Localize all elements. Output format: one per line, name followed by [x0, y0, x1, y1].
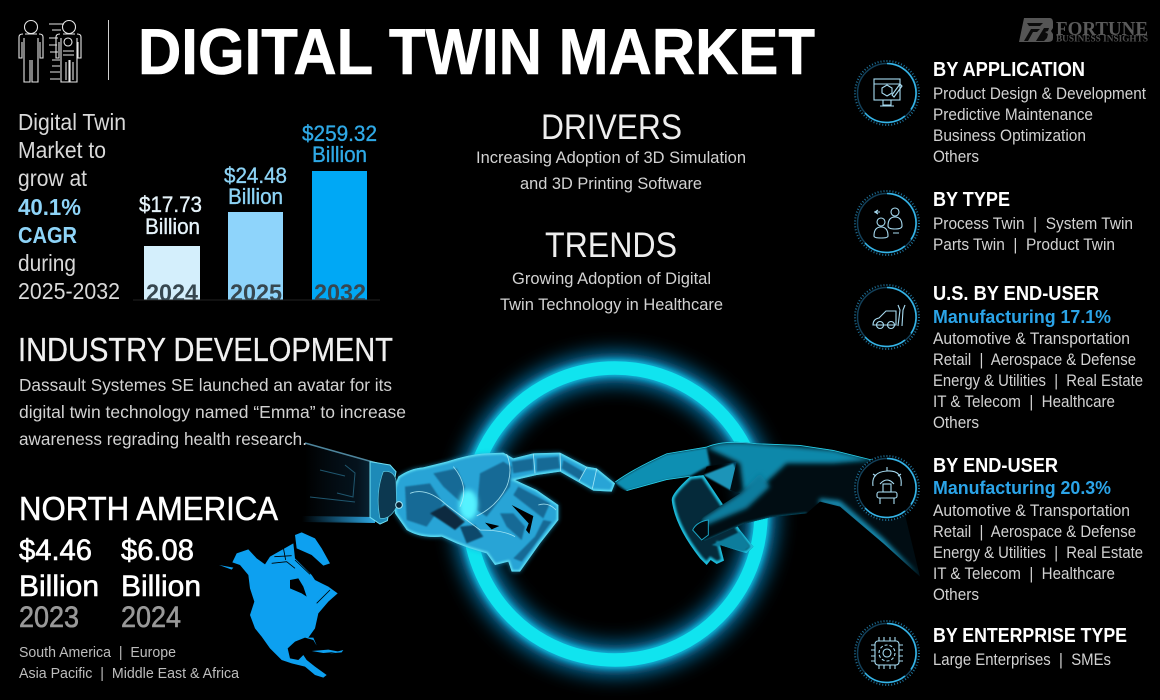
index finger light	[615, 447, 710, 491]
hand silhouette	[615, 442, 920, 577]
bar chart: $24.48	[224, 163, 287, 188]
CAGR text block: 2025-2032	[18, 278, 120, 304]
thumbnail	[693, 520, 708, 540]
greenland	[295, 532, 330, 566]
human hand	[615, 442, 920, 577]
icon: chip gear	[855, 621, 919, 685]
panel: by end-user: BY END-USER	[933, 455, 1059, 477]
panel: by end-user: Manufacturing 20.3%	[933, 478, 1111, 498]
title: DIGITAL TWIN MARKET	[138, 15, 815, 88]
panel: by enterprise type: BY ENTERPRISE TYPE	[933, 625, 1127, 647]
arm band light	[818, 498, 920, 577]
back of hand light	[707, 442, 873, 490]
robot hand rim light	[393, 453, 615, 572]
trends: TRENDS	[545, 226, 677, 265]
panel: by application: Predictive Maintenance	[933, 106, 1093, 124]
panel: by end-user	[855, 455, 1143, 604]
bar 2025	[228, 212, 283, 300]
drivers: and 3D Printing Software	[520, 175, 702, 193]
CAGR text block: Market to	[18, 137, 106, 163]
map: north america	[219, 532, 343, 678]
panel: u.s. by end-user	[855, 283, 1143, 432]
robot joint lines	[410, 453, 597, 537]
panel: by end-user: Others	[933, 586, 979, 604]
logo: FORTUNE	[1056, 18, 1148, 40]
mainland	[232, 543, 338, 678]
value 2024	[121, 534, 201, 634]
panel: u.s. by end-user: Automotive & Transportation	[933, 330, 1130, 348]
drivers	[476, 108, 746, 193]
bar 2032	[312, 171, 367, 300]
panel: by end-user: Automotive & Transportation	[933, 502, 1130, 520]
CAGR text block: grow at	[18, 165, 87, 191]
bar chart: 2032	[314, 280, 366, 307]
value 2023: 2023	[19, 601, 79, 634]
bar chart: Billion	[312, 142, 367, 167]
industry development: awareness regrading health research.	[19, 429, 307, 449]
panel: by end-user: IT & Telecom | Healthcare	[933, 565, 1115, 583]
industry development: digital twin technology named “Emma” to increase	[19, 402, 406, 422]
robot cuff	[370, 462, 396, 524]
hand rim	[615, 442, 873, 491]
logo	[1019, 18, 1148, 44]
alaska peninsula	[219, 565, 233, 570]
other regions	[19, 644, 240, 682]
robot core glow	[459, 490, 478, 520]
panel: u.s. by end-user: Energy & Utilities | Real Estate	[933, 372, 1143, 390]
panel: by application	[855, 59, 1146, 166]
robot hand silhouette	[393, 453, 615, 572]
bar chart: Billion	[228, 184, 283, 209]
value 2024: $6.08	[121, 534, 194, 567]
panel: u.s. by end-user: IT & Telecom | Healthcare	[933, 393, 1115, 411]
north america heading: NORTH AMERICA	[19, 490, 278, 527]
panel: by application: BY APPLICATION	[933, 59, 1085, 81]
hudson bay	[290, 578, 307, 597]
title divider	[108, 20, 110, 80]
value 2023: $4.46	[19, 534, 92, 567]
industry development: INDUSTRY DEVELOPMENT	[18, 331, 393, 368]
robot thumb dark panel	[430, 505, 465, 530]
robot hand shaded panels	[405, 457, 583, 562]
trends: Growing Adoption of Digital	[512, 270, 711, 288]
CAGR text block: 40.1%	[18, 194, 81, 220]
panel: u.s. by end-user: U.S. BY END-USER	[933, 283, 1100, 305]
panel: by end-user: Retail | Aerospace & Defense	[933, 523, 1136, 541]
CAGR text block: during	[18, 250, 76, 276]
panel: by end-user: Energy & Utilities | Real Estate	[933, 544, 1143, 562]
bar chart: $259.32	[302, 121, 377, 146]
CAGR text block: CAGR	[18, 222, 77, 248]
panel: by enterprise type	[855, 621, 1127, 685]
icon: car and wrench	[855, 285, 919, 349]
panel: by application: Business Optimization	[933, 127, 1086, 145]
drivers: DRIVERS	[541, 108, 682, 147]
arctic channels	[260, 548, 330, 651]
CAGR text block	[18, 109, 126, 304]
trends: Twin Technology in Healthcare	[500, 296, 723, 314]
robot hand glow	[393, 453, 615, 572]
panel: by application: Others	[933, 148, 979, 166]
industry development: Dassault Systemes SE launched an avatar for its	[19, 375, 392, 395]
panel: by type: Process Twin | System Twin	[933, 215, 1133, 233]
robot gaps between fingers	[512, 505, 533, 534]
neon ring	[469, 368, 761, 660]
icon: factory gear	[855, 456, 919, 520]
robot hand	[370, 453, 615, 572]
logo: BUSINESS INSIGHTS	[1056, 34, 1148, 44]
drivers: Increasing Adoption of 3D Simulation	[476, 149, 746, 167]
panel: u.s. by end-user: Others	[933, 414, 979, 432]
icon: twin people	[855, 191, 919, 255]
bar chart: 2024	[146, 280, 199, 307]
other regions: South America | Europe	[19, 644, 176, 661]
panel: by type	[855, 189, 1133, 255]
panel: u.s. by end-user: Manufacturing 17.1%	[933, 307, 1111, 327]
bar chart: $17.73	[139, 192, 202, 217]
bar 2024	[144, 246, 200, 300]
panel: by application: Product Design & Development	[933, 85, 1146, 103]
robot arm	[302, 443, 380, 523]
value 2023: Billion	[19, 570, 99, 603]
bar chart	[133, 121, 380, 307]
value 2024: Billion	[121, 570, 201, 603]
panel: by type: BY TYPE	[933, 189, 1010, 211]
panel: by type: Parts Twin | Product Twin	[933, 236, 1115, 254]
icon: human and digital twin	[19, 20, 81, 82]
bar chart: 2025	[230, 280, 282, 307]
panel: by enterprise type: Large Enterprises | SMEs	[933, 651, 1111, 669]
CAGR text block: Digital Twin	[18, 109, 126, 135]
thumb light	[700, 473, 770, 525]
palm highlight	[703, 463, 745, 490]
trends	[500, 226, 723, 314]
other regions: Asia Pacific | Middle East & Africa	[19, 665, 240, 682]
folded fingers	[672, 475, 753, 565]
industry development	[18, 331, 406, 449]
value 2023	[19, 534, 99, 634]
caribbean islands	[312, 650, 343, 653]
panel: u.s. by end-user: Retail | Aerospace & Defense	[933, 351, 1136, 369]
value 2024: 2024	[121, 601, 181, 634]
icon: design monitor	[855, 61, 919, 125]
bar chart: Billion	[145, 214, 200, 239]
